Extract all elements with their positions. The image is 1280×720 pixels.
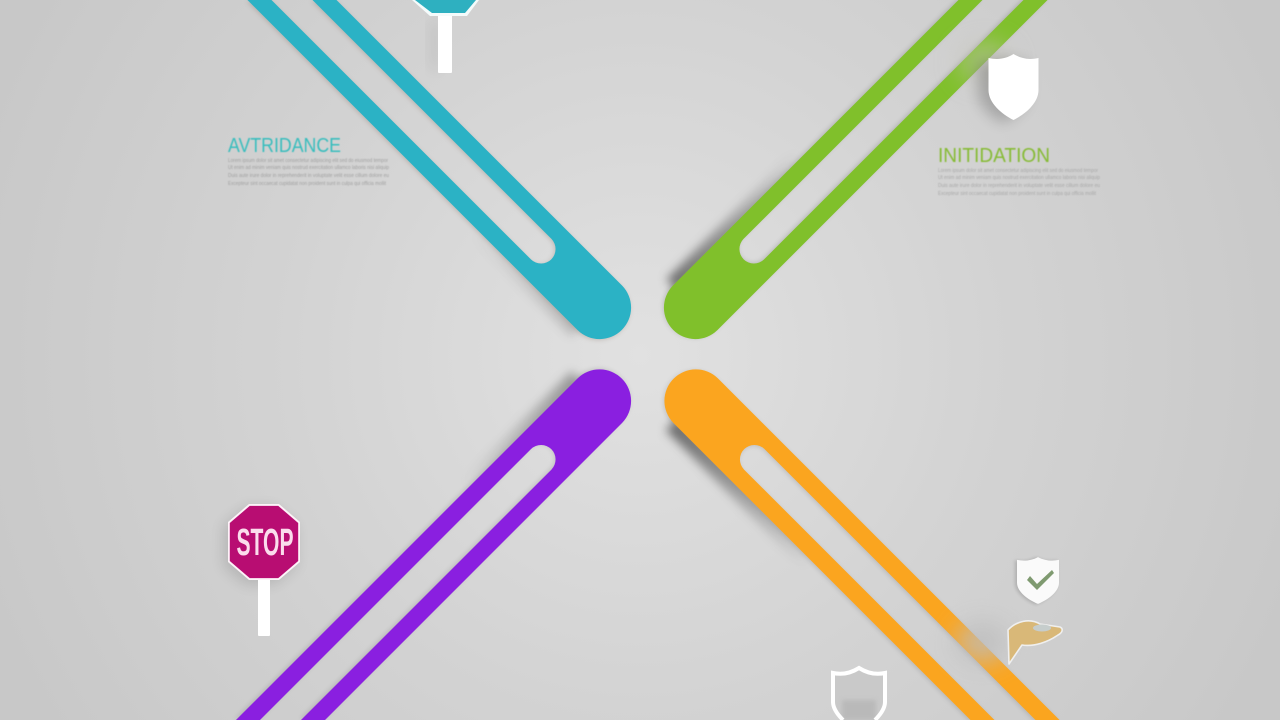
purple arm <box>236 369 631 720</box>
icon: check shield <box>1015 557 1059 605</box>
fade on green arm <box>959 42 1011 82</box>
teal arm <box>247 0 631 339</box>
text block: teal: Lorem ipsum dolor sit amet consectetur adipiscing elit sed do eiusmod tempor <box>228 158 388 164</box>
icon: hand <box>1008 621 1062 664</box>
orange arm <box>664 369 1060 720</box>
icon: teal stop sign <box>412 0 479 73</box>
heading: green: INITIDATION <box>938 145 1050 167</box>
icon: outline shield <box>833 668 885 720</box>
text block: teal: Ut enim ad minim veniam quis nostrud exercitation ullamco laboris nisi aliquip <box>228 165 389 171</box>
stop label: STOP <box>236 522 294 564</box>
text block: green: Ut enim ad minim veniam quis nostrud exercitation ullamco laboris nisi aliquip <box>938 175 1100 181</box>
text block: green: Lorem ipsum dolor sit amet consectetur adipiscing elit sed do eiusmod tempor <box>938 168 1098 174</box>
text block: teal <box>228 158 389 187</box>
text block: teal: Excepteur sint occaecat cupidatat non proident sunt in culpa qui officia mollit <box>228 181 387 187</box>
text block: teal: Duis aute irure dolor in reprehenderit in voluptate velit esse cillum dolore eu <box>228 173 389 179</box>
icon: magenta stop sign <box>224 504 300 636</box>
heading: teal: AVTRIDANCE <box>228 135 341 157</box>
text block: green <box>938 168 1100 197</box>
text block: green: Excepteur sint occaecat cupidatat non proident sunt in culpa qui officia mollit <box>938 191 1097 197</box>
fade on orange arm <box>956 622 1008 662</box>
green arm <box>664 0 1048 339</box>
text block: green: Duis aute irure dolor in reprehenderit in voluptate velit esse cillum dolore eu <box>938 183 1100 189</box>
icon: white shield <box>978 54 1038 123</box>
